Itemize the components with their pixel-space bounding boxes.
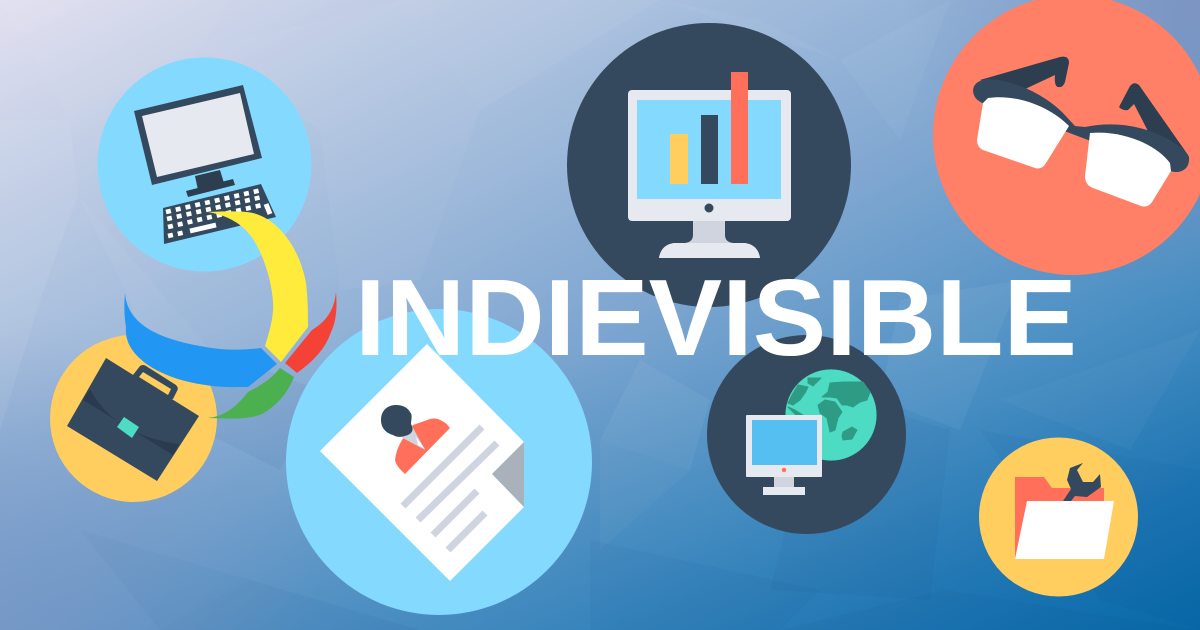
briefcase flap shadow: [83, 389, 179, 455]
icon: briefcase: [50, 335, 217, 502]
folder front: [1015, 501, 1114, 559]
swoosh: red: [285, 292, 336, 373]
briefcase body: [67, 358, 199, 481]
icon: folder with wrench: [979, 438, 1138, 596]
icon: resume document: [286, 309, 592, 615]
monitor: [134, 85, 262, 197]
monitor frame: [628, 90, 791, 221]
glasses temples: [980, 57, 1069, 90]
paper sheet: [320, 344, 524, 581]
glasses frame: [973, 79, 1189, 172]
globe landmasses: [788, 378, 870, 440]
swoosh: blue: [124, 293, 277, 387]
monitor screen: [637, 100, 781, 199]
briefcase handle: [100, 365, 178, 400]
icon: glasses: [933, 0, 1200, 275]
wrench: [1063, 463, 1101, 501]
right lens: [1085, 133, 1171, 206]
title: INDIEVISIBLE: [355, 257, 1077, 379]
keyboard: [163, 184, 276, 244]
portrait: [381, 405, 450, 474]
small monitor: [746, 415, 822, 477]
icon: globe with monitor: [707, 335, 906, 534]
briefcase clasp: [117, 417, 139, 438]
swoosh: green: [207, 368, 294, 419]
circle: chart backdrop: [567, 23, 851, 307]
globe: [785, 369, 877, 461]
circle: briefcase backdrop: [50, 335, 217, 502]
folder back: [1015, 477, 1104, 559]
circle: document backdrop: [286, 309, 592, 615]
circle: folder backdrop: [979, 438, 1138, 596]
circle: globe backdrop: [707, 335, 906, 534]
icon: bar chart monitor: [567, 23, 851, 307]
circle: computer backdrop: [98, 58, 312, 272]
bar chart: [670, 72, 748, 184]
text lines: [403, 427, 497, 550]
logo: four-colour swoosh: [124, 211, 336, 419]
circle: glasses backdrop: [933, 0, 1200, 275]
swoosh: yellow: [208, 211, 308, 362]
left lens: [977, 97, 1069, 168]
icon: desktop computer with keyboard: [98, 58, 312, 272]
monitor stand: [659, 221, 760, 258]
page fold: [492, 442, 524, 507]
